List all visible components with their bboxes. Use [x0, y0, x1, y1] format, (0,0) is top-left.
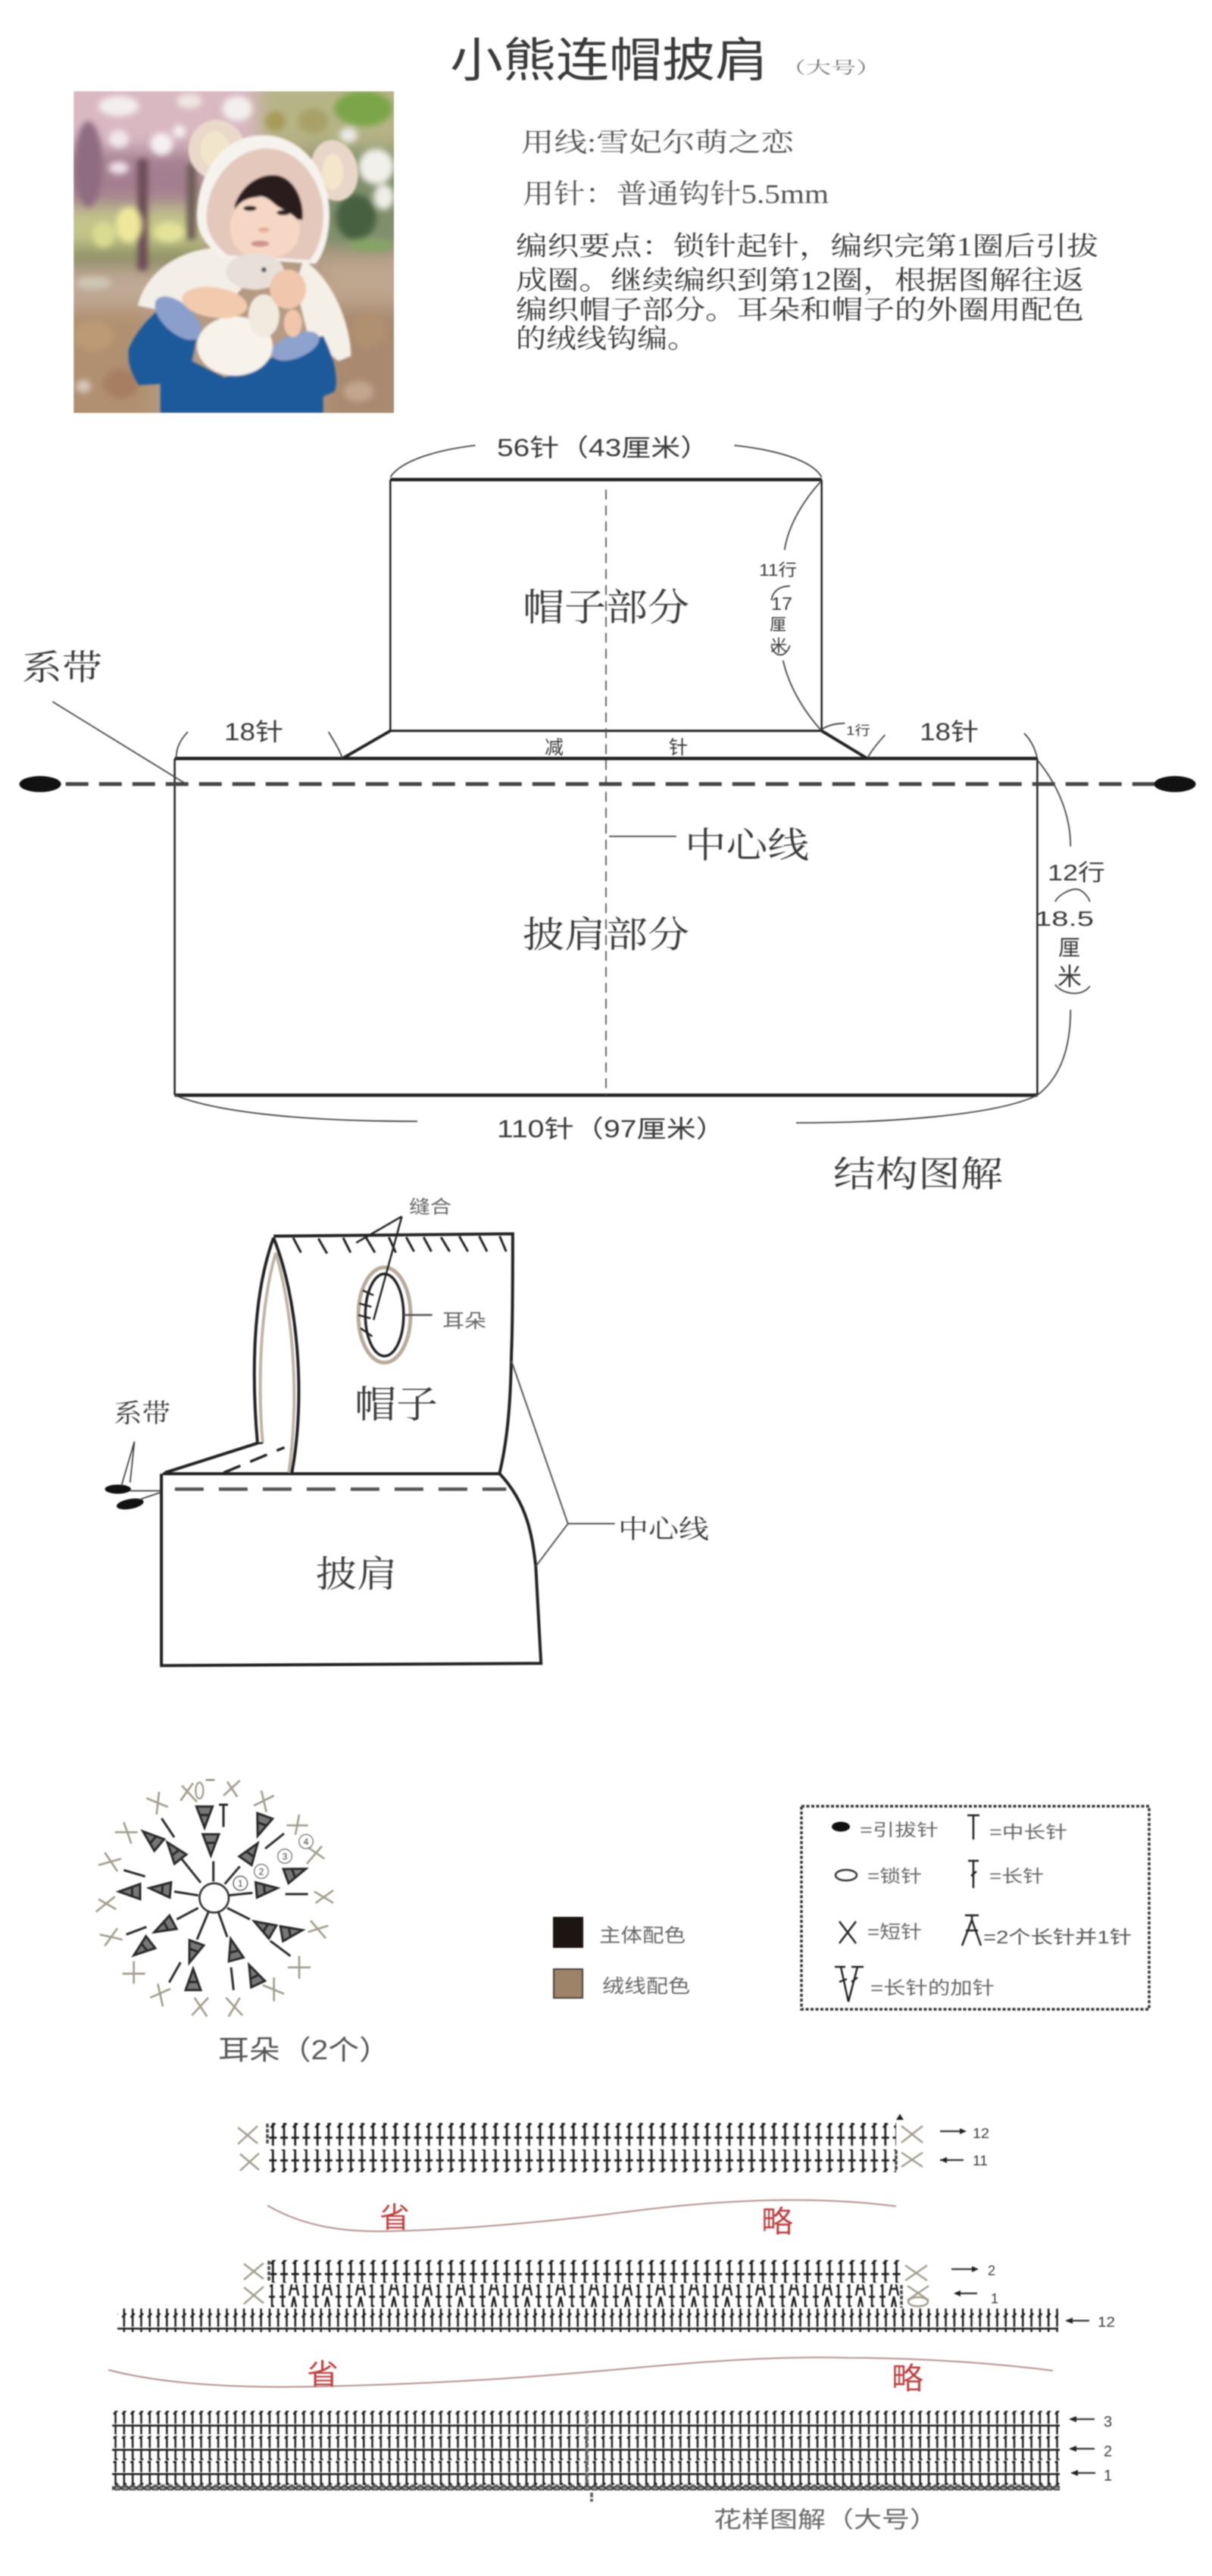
one row label: 1行 [846, 724, 870, 738]
structure caption: 结构图解 [833, 1155, 1003, 1195]
title: 小熊连帽披肩 [450, 35, 768, 87]
cape section label: 披肩部分 [523, 915, 689, 955]
cape height labels: 米 [1057, 963, 1082, 990]
half double crochet: =中长针 [989, 1822, 1067, 1842]
cape height labels: 18.5 [1035, 907, 1094, 930]
omission text: 略 [892, 2362, 923, 2396]
slip stitch [832, 1821, 939, 1840]
omission text [380, 2202, 793, 2239]
instructions line 4: 的绒线钩编。 [516, 324, 698, 354]
round numbers: 3 [283, 1851, 288, 1862]
row 2 [112, 2436, 1060, 2460]
row arrows and numbers: 2 [988, 2263, 995, 2278]
double crochet two together [962, 1915, 1132, 1948]
title [450, 35, 881, 87]
chart caption: 花样图解（大号） [714, 2508, 938, 2533]
row arrows and numbers: 12 [973, 2126, 989, 2141]
omission text: 略 [761, 2206, 793, 2239]
tie label: 系带 [114, 1399, 170, 1428]
ring [199, 1884, 229, 1912]
structure diagram [20, 434, 1196, 1195]
cape height labels [1035, 861, 1105, 990]
hood [197, 135, 330, 264]
hat height labels: 米 [770, 636, 787, 655]
cape stitch chart [108, 2309, 1115, 2533]
center line label: 中心线 [618, 1515, 709, 1544]
hands [180, 283, 249, 322]
assembly diagram [105, 1197, 709, 1665]
half double crochet [967, 1815, 1067, 1842]
plush colour label: 绒线配色 [602, 1976, 690, 1997]
right bear ear [311, 139, 359, 203]
size note: （大号） [781, 58, 881, 77]
toy [197, 316, 273, 376]
yarn: 用线:雪妃尔萌之恋 [521, 128, 795, 158]
photo: child wearing bear hood [73, 91, 395, 414]
left bear ear [189, 120, 245, 180]
omission text: 省 [307, 2359, 339, 2391]
sleeve cuffs [147, 289, 209, 348]
single crochet [839, 1921, 922, 1943]
center line label: 中心线 [685, 827, 809, 866]
outer round crosses [96, 1780, 333, 2017]
hook: 用针：普通钩针5.5mm [523, 179, 829, 209]
double crochet [968, 1861, 1044, 1888]
seam label: 缝合 [409, 1197, 451, 1218]
face [230, 196, 300, 258]
row 1 [267, 2284, 903, 2307]
cape label: 披肩 [316, 1555, 398, 1595]
round numbers: 4 [304, 1837, 309, 1847]
double crochet increase [835, 1967, 995, 2002]
main colour label: 主体配色 [599, 1925, 686, 1946]
swatch: plush colour [554, 1969, 583, 1998]
row markers: 3 [1104, 2414, 1112, 2431]
row 12 [117, 2309, 1058, 2332]
omission text: 省 [380, 2202, 410, 2234]
row 3 [112, 2411, 1060, 2434]
key border [801, 1806, 1149, 2009]
row 12 [266, 2123, 896, 2146]
ear chart [96, 1780, 390, 2065]
omission text [307, 2359, 923, 2396]
spokes [123, 1818, 308, 1990]
row markers: 1 [1104, 2468, 1112, 2484]
omission curve [108, 2358, 1053, 2387]
row arrows and numbers [940, 2126, 998, 2306]
ear label: 耳朵 [442, 1311, 486, 1332]
pattern outline [20, 445, 1196, 1123]
row markers: 2 [1104, 2443, 1112, 2460]
decrease label [545, 737, 688, 758]
decrease label: 减 [545, 737, 564, 758]
hat stitch chart [238, 2114, 998, 2308]
hat height labels: 11行 [759, 561, 797, 580]
instructions line 2: 成圈。继续编织到第12圈，根据图解往返 [516, 266, 1084, 295]
cape height labels: 12行 [1048, 861, 1105, 886]
edge crosses [238, 2126, 929, 2304]
hood and cape outline [105, 1217, 615, 1665]
hair [235, 175, 303, 220]
vertical joining chain [587, 2412, 592, 2502]
round numbers: 2 [259, 1866, 264, 1877]
slip stitch: =引拔针 [860, 1821, 939, 1840]
row arrows and numbers: 11 [973, 2153, 988, 2168]
chain stitch: =锁针 [867, 1866, 922, 1886]
left scarf [136, 247, 243, 311]
cape height labels: 厘 [1058, 936, 1080, 961]
hat height labels [759, 561, 797, 655]
hood trim [207, 148, 323, 260]
tie label: 系带 [22, 649, 102, 687]
row 12 marker: 12 [1098, 2315, 1115, 2330]
double crochet: =长针 [989, 1866, 1044, 1886]
double crochet two together: =2个长针并1针 [983, 1927, 1132, 1948]
row 11 [266, 2149, 896, 2172]
hat height labels: 厘 [770, 615, 786, 634]
instructions line 1: 编织要点：锁针起针，编织完第1圈后引拔 [516, 232, 1098, 261]
double crochet increase: =长针的加针 [870, 1978, 995, 1999]
single crochet: =短针 [867, 1922, 922, 1943]
hat label: 帽子 [355, 1383, 438, 1426]
row 12 marker [1065, 2315, 1115, 2330]
right stitches label: 18针 [920, 718, 979, 746]
round numbers [233, 1834, 313, 1890]
hat section label: 帽子部分 [523, 586, 689, 629]
right scarf [295, 260, 351, 361]
materials text [516, 128, 1098, 354]
ear caption: 耳朵（2个） [218, 2034, 390, 2065]
instructions line 3: 编织帽子部分。耳朵和帽子的外圈用配色 [516, 295, 1084, 325]
triple stitches [119, 1805, 308, 1990]
row 2 [270, 2260, 903, 2283]
bottom width label: 110针（97厘米） [497, 1115, 726, 1143]
turning chains [267, 2124, 901, 2308]
colour legend [553, 1917, 690, 1998]
row arrows and numbers: 1 [991, 2291, 998, 2306]
left stitches label: 18针 [224, 718, 283, 746]
omission curve [267, 2200, 896, 2231]
top width label: 56针（43厘米） [497, 434, 710, 461]
row 1 [112, 2461, 1060, 2485]
foundation chain [112, 2484, 1060, 2490]
hat height labels: 17 [771, 594, 792, 614]
row markers [1069, 2414, 1112, 2484]
swatch: main colour [553, 1917, 583, 1948]
symbol key [801, 1806, 1149, 2009]
sweater [128, 311, 336, 413]
decrease label: 针 [669, 737, 688, 758]
chain stitch [836, 1866, 922, 1886]
round numbers: 1 [238, 1878, 243, 1889]
